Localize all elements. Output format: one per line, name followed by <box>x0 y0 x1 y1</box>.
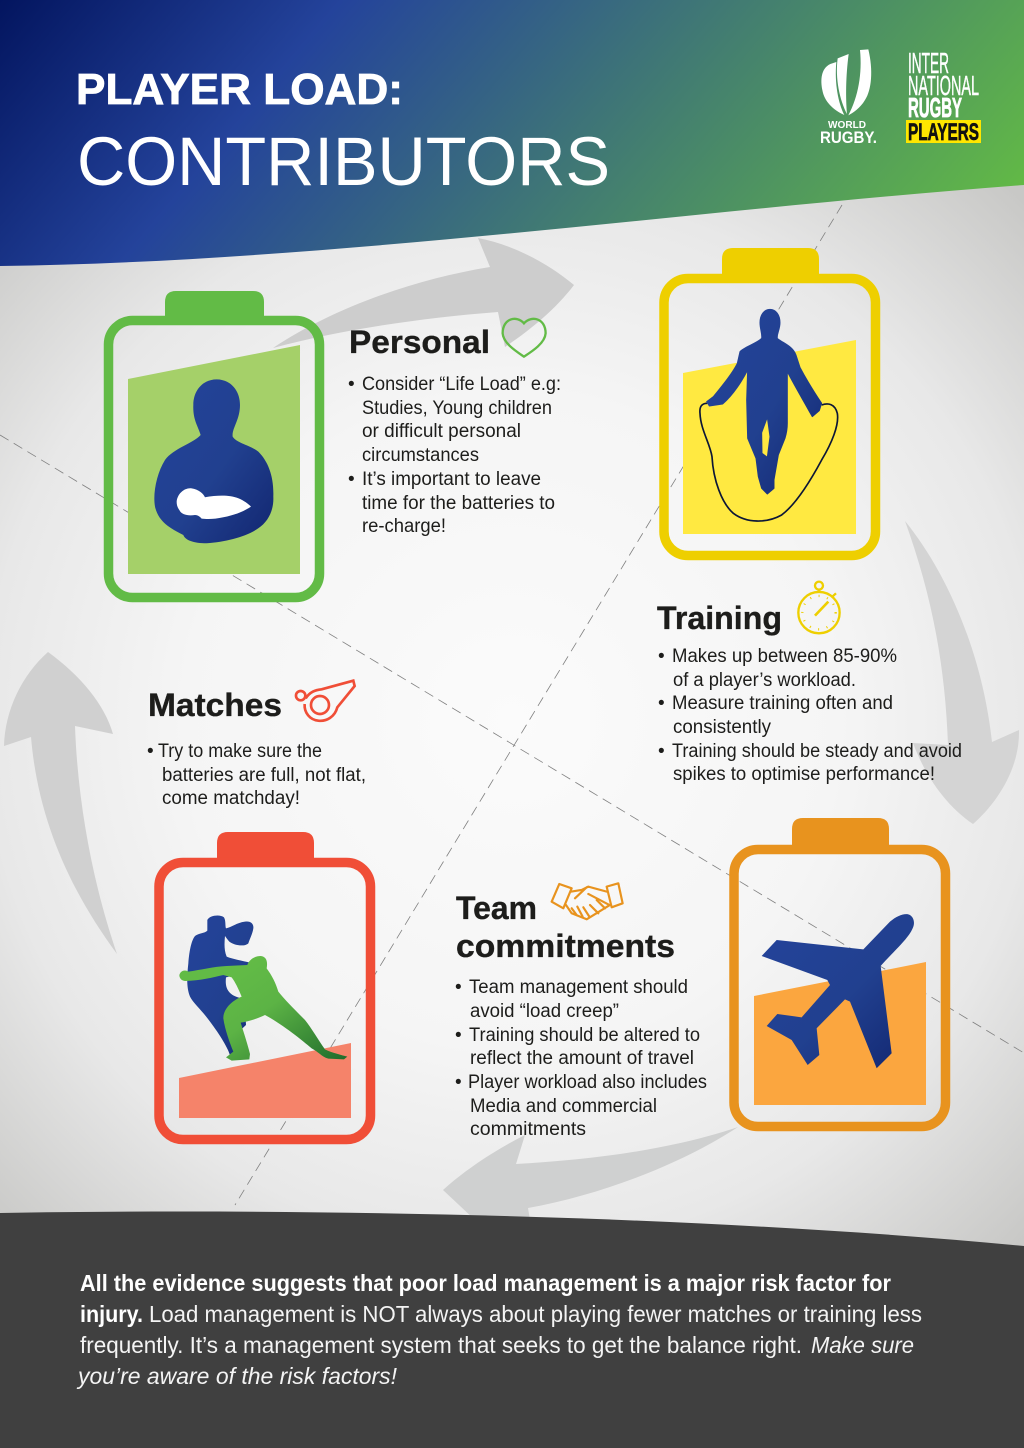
panel: personal text: time for the batteries to <box>362 493 555 514</box>
arrow: bottom, team commitments to matches <box>443 1127 738 1220</box>
arrow: top, personal to training <box>273 238 574 348</box>
icon: rugby tackle <box>179 915 347 1061</box>
panel: personal text: Consider “Life Load” e.g: <box>362 374 561 395</box>
panel: team commitments text: Player workload also includes <box>468 1072 707 1093</box>
icon: handshake <box>552 883 623 919</box>
panel: team commitments text: • <box>455 1072 462 1093</box>
footer text: All the evidence suggests that poor load management is a major risk factor for <box>80 1270 891 1296</box>
panel: matches text: • <box>147 741 154 762</box>
panel: team commitments text: Media and commercial <box>470 1096 657 1117</box>
panel: team commitments text <box>455 883 707 1140</box>
panel: personal text: It’s important to leave <box>362 469 541 490</box>
panel: training text: spikes to optimise performance! <box>673 764 935 785</box>
header banner <box>0 0 1024 266</box>
panel: team commitments text: avoid “load creep” <box>470 1001 619 1022</box>
panel: team commitments text: commitments <box>456 928 675 964</box>
arrow: left, matches to personal <box>4 652 117 954</box>
icon: heart <box>503 319 546 357</box>
panel: training text: • <box>658 646 665 667</box>
logo: International Rugby Players: RUGBY <box>908 92 962 123</box>
footer text: injury. <box>80 1301 143 1327</box>
footer band <box>0 1212 1024 1448</box>
footer text: Make sure <box>811 1332 914 1358</box>
footer text: Load management is NOT always about playing fewer matches or training less <box>149 1301 922 1327</box>
title <box>76 65 610 200</box>
panel: team commitments text: • <box>455 977 462 998</box>
title: PLAYER LOAD: <box>76 65 403 114</box>
panel: team commitments text: Team <box>456 890 537 926</box>
panel: personal text: Studies, Young children <box>362 398 552 419</box>
icon: player skipping rope <box>700 309 838 521</box>
icon: whistle <box>296 681 355 721</box>
panel: training battery <box>664 248 876 556</box>
panel: matches battery <box>159 832 370 1140</box>
panel: matches text: Matches <box>148 687 282 723</box>
panel: training text: of a player’s workload. <box>673 670 856 691</box>
panel: personal text <box>348 319 561 537</box>
panel: training text: Measure training often and <box>672 693 893 714</box>
panel: team commitments text: commitments <box>470 1119 586 1140</box>
panel: personal text: circumstances <box>362 445 479 466</box>
arrow: right, training to team commitments <box>905 521 1019 824</box>
panel: team commitments battery <box>734 818 946 1126</box>
footer text: frequently. It’s a management system that seeks to get the balance right. <box>80 1332 802 1358</box>
panel: training text: Training should be steady and avoid <box>672 741 962 762</box>
logo: World Rugby <box>820 49 877 147</box>
footer text <box>76 1270 922 1389</box>
panel: personal text: • <box>348 374 355 395</box>
panel: training text: Makes up between 85-90% <box>672 646 897 667</box>
panel: team commitments text: Team management should <box>469 977 688 998</box>
panel: training text: consistently <box>673 717 771 738</box>
panel: training text <box>657 582 962 785</box>
logo: International Rugby Players: INTER <box>908 48 949 80</box>
panel: team commitments text: Training should be altered to <box>469 1025 700 1046</box>
logo: World Rugby: RUGBY. <box>820 128 877 147</box>
panel: matches text: Try to make sure the <box>158 741 322 762</box>
logo: World Rugby: WORLD <box>828 119 866 131</box>
icon: airplane <box>762 914 914 1068</box>
panel: matches text: batteries are full, not flat, <box>162 765 366 786</box>
panel: matches text <box>147 681 366 809</box>
panel: team commitments text: reflect the amount of travel <box>470 1048 694 1069</box>
panel: training text: • <box>658 741 665 762</box>
logo: International Rugby Players: PLAYERS <box>908 119 979 146</box>
panel: training text: Training <box>657 600 782 636</box>
footer text: you’re aware of the risk factors! <box>76 1363 398 1389</box>
panel: matches text: come matchday! <box>162 788 300 809</box>
panel: personal text: Personal <box>349 324 490 360</box>
icon: parent holding baby <box>154 379 273 543</box>
panel: team commitments text: • <box>455 1025 462 1046</box>
dashed diagonal lines <box>0 205 1024 1205</box>
panel: personal battery <box>108 291 320 598</box>
title: CONTRIBUTORS <box>77 123 610 200</box>
icon: stopwatch <box>798 582 840 633</box>
panel: training text: • <box>658 693 665 714</box>
panel: personal text: • <box>348 469 355 490</box>
logo: International Rugby Players <box>906 48 981 146</box>
panel: personal text: re-charge! <box>362 516 446 537</box>
panel: personal text: or difficult personal <box>362 421 521 442</box>
